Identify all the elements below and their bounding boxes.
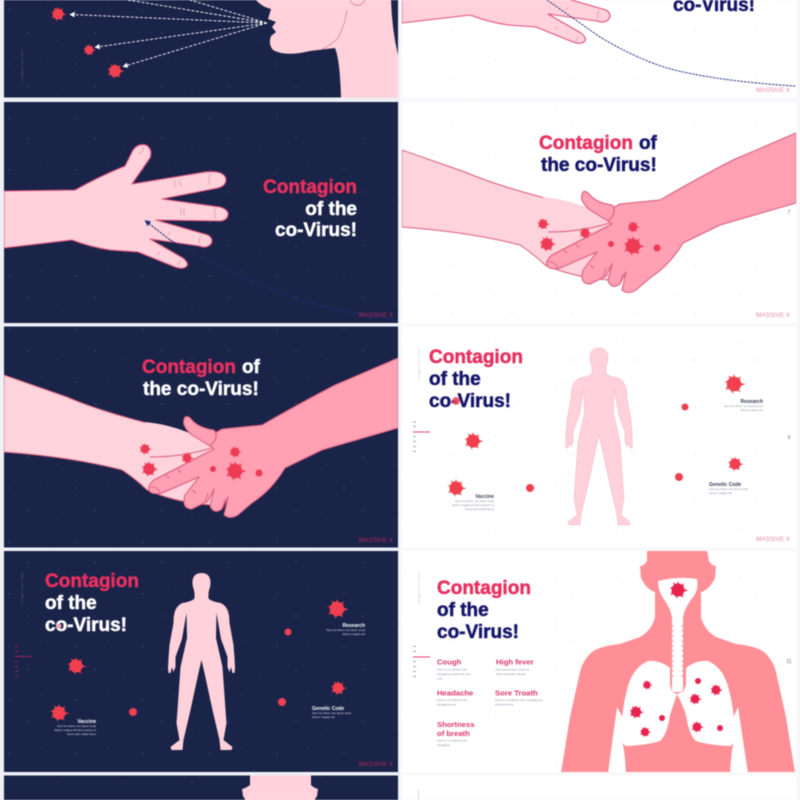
right lung [677,661,734,746]
symptom: shortness of breath: Shortness [437,720,475,729]
icons: virus particles [447,374,746,497]
illustration: hand [402,0,626,43]
title [437,578,531,643]
icons: virus particles [51,6,124,79]
label: research [326,623,365,636]
symptom: sore throat: Sore Troath [495,688,538,698]
side caption: Contagion of the co-Virus [417,348,421,380]
dashed arrow [147,222,170,240]
panel: handshake on navy [4,326,398,548]
label: vaccine [54,719,97,736]
panel: human body on navy [4,551,398,772]
label: genetic code: Genetic Code [312,706,344,712]
illustration: handshake with virus [402,133,796,292]
label: vaccine: Sed non libero nec lacus ornat [57,724,96,728]
label: research: Sed non libero nec lacus ornat [724,404,763,408]
illustration: face in profile [256,0,398,98]
panel: human body on white [412,348,791,542]
label: vaccine: Vaccine [475,494,494,500]
illustration: body silhouette [168,573,235,750]
panel: symptoms and lungs [402,550,796,773]
symptom: headache: struggling ersa. [437,702,457,706]
panel: handshake on white [401,132,797,318]
illustration: head [242,775,318,800]
title: Contagion of [539,133,658,154]
side caption rule [417,790,420,800]
symptom: high fever [496,658,534,676]
title: of the [45,593,97,614]
symptom: high fever: High fever [496,658,534,666]
symptom: cough: erat. [437,676,443,680]
label: genetic code: Sed non libero nec lacus ornat [312,711,351,715]
label: genetic code [312,706,351,719]
faint path [170,240,398,320]
label: vaccine: dictum magna elit lacus ipsum et [452,503,494,507]
title: of the [437,600,489,621]
side caption: Contagion of the co-Virus [20,572,24,604]
label: research [724,399,763,412]
label: genetic code: dictum magna elit [709,491,732,495]
brand mark: MASSIVE X [756,312,791,319]
symptom: cough: down in co efficitur erat, [437,668,468,672]
brand mark: MASSIVE X [359,537,394,544]
icon: virus over title [451,396,462,406]
side index [413,646,430,677]
label: research: dictum magna elit [342,632,365,636]
symptom: shortness of breath: struggling. [437,743,451,747]
arm gaps [608,707,748,773]
title: co-Virus! [275,220,357,241]
symptom: sore throat [495,688,543,706]
illustration: body silhouette [566,348,632,525]
symptom: shortness of breath: of breath [437,729,470,738]
label: genetic code [709,482,748,495]
panel: breath droplets [4,0,398,98]
title: the co-Virus! [541,155,657,176]
title [142,357,261,400]
title: Contagion of [142,357,261,378]
symptom: cough: struggling enacted lay and [437,672,471,676]
title [539,133,658,176]
label: research: Sed non libero nec lacus ornat [326,628,365,632]
title: of the [305,199,357,220]
symptom: cough: Cough [437,658,462,666]
label: vaccine: Vaccine [77,719,96,725]
label: vaccine: Sed non libero nec lacus ornat [455,499,494,503]
title: Contagion [429,347,523,368]
left lung [622,661,677,746]
label: research: Research [342,623,365,629]
symptom: high fever: tellus imperdiet lobortis [496,672,526,676]
illustration: handshake with virus [4,358,398,518]
side caption: Contagion of the co-Virus [20,49,24,81]
brand mark: MASSIVE X [756,87,791,94]
side index [15,646,32,677]
brand mark: MASSIVE X [359,761,394,768]
icons: virus particles [50,599,349,722]
label: research: dictum magna elit [740,408,763,412]
label: vaccine: lacus quis mattis lacus [67,732,97,736]
label: research: Research [740,399,763,405]
title: Contagion [45,571,139,592]
label: genetic code: dictum magna elit [312,715,335,719]
title: co-Virus! [45,615,127,636]
title [45,571,139,636]
airway [658,578,698,692]
label: vaccine: dictum magna elit lacus ipsum et [54,728,96,732]
symptom: headache: down in co efficitur erat, [437,698,468,702]
title: Contagion [437,578,531,599]
page number: 7 [788,210,791,216]
side index [413,422,430,452]
illustration: torso with lungs [561,550,795,773]
symptom: headache [437,688,474,706]
panel: next slide navy [4,775,398,800]
title: co-Virus! [437,622,519,643]
title [429,347,523,412]
panel: open hand on navy [4,102,398,323]
symptom: headache: Headache [437,688,474,698]
icon: virus over title [56,624,62,628]
label: genetic code: Sed non libero nec lacus ornat [709,487,748,491]
arrows: exhaled droplets [72,0,267,66]
symptom: sore throat: down in co efficitur erat, struggling ac [495,698,543,702]
page number: 11 [786,659,792,665]
illustration: hand [4,145,228,268]
label: genetic code: Genetic Code [709,482,741,488]
label: vaccine: lacus quis mattis lacus [465,507,495,511]
symptom: cough [437,658,471,680]
title: of the [429,369,481,390]
page number: 9 [788,435,791,441]
side caption: Contagion of the co-Virus [417,572,421,604]
label: vaccine [452,494,495,511]
symptom: shortness of breath: down in co efficitur erat, [437,738,468,742]
title: Contagion [263,177,357,198]
dashed path [547,0,795,86]
icons: virus particles in airway and lungs [629,581,723,738]
brand mark: MASSIVE X [756,536,791,543]
symptom: sore throat: tellus and erat [495,702,513,706]
title: the co-Virus! [143,379,259,400]
symptom: shortness of breath [437,720,475,747]
title: co-Virus! [429,391,511,412]
panel: hand with transmission path [402,0,796,98]
brand mark: MASSIVE X [359,312,394,319]
title [263,177,357,241]
symptom: high fever: Duis elementum metus ac [496,668,530,672]
panel: next slide white [402,776,796,800]
